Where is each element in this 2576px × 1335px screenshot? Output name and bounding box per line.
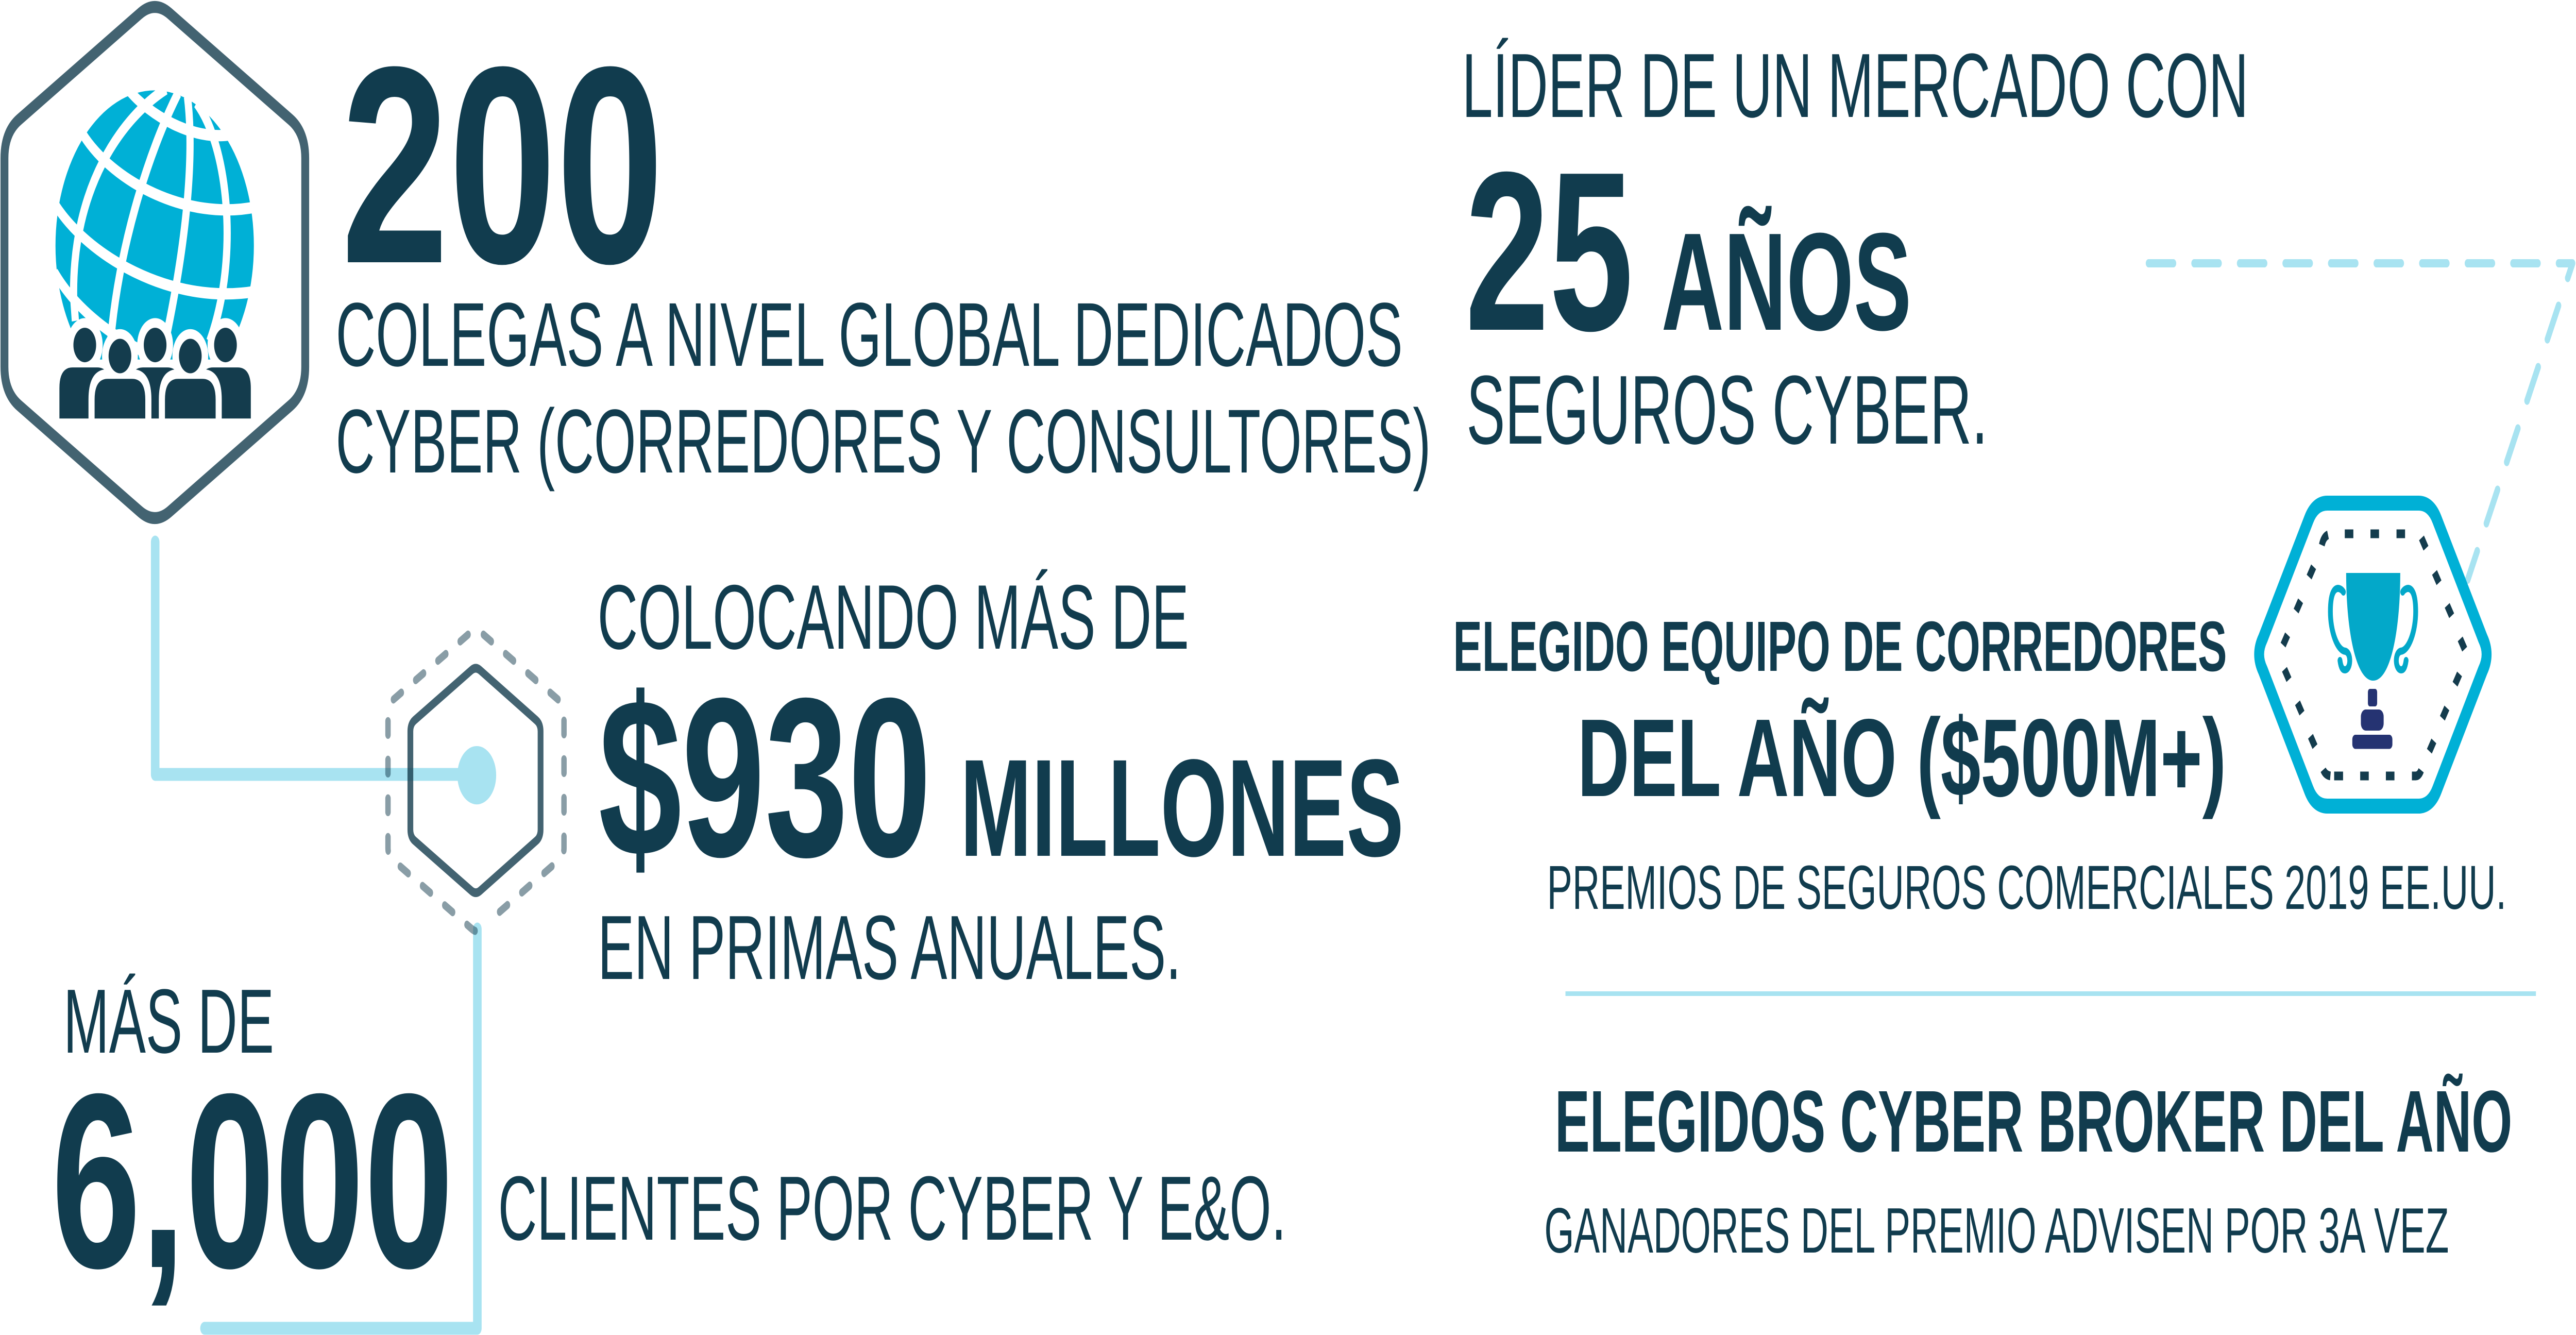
leader caption: SEGUROS CYBER.: [1466, 356, 1988, 465]
trophy handles: [2330, 588, 2416, 670]
trophy base: [2352, 689, 2393, 749]
block: 200 colleagues: [336, 9, 1431, 492]
leader intro: LÍDER DE UN MERCADO CON: [1462, 35, 2248, 137]
premiums caption: EN PRIMAS ANUALES.: [598, 897, 1181, 999]
globe and colleagues artwork: [55, 89, 256, 428]
dashed hexagon: [388, 635, 564, 931]
number 6,000: 6,000: [52, 1042, 453, 1320]
block: cyber broker award: [1544, 1072, 2512, 1266]
solid hexagon: [411, 668, 540, 893]
description line 1: COLEGAS A NIVEL GLOBAL DEDICADOS: [336, 284, 1403, 385]
award heading line 1: ELEGIDO EQUIPO DE CORREDORES: [1453, 606, 2227, 686]
dashed inner ring: [2283, 534, 2465, 776]
word AÑOS: AÑOS: [1662, 204, 1911, 360]
hexagon outline: [2259, 503, 2486, 806]
award caption: GANADORES DEL PREMIO ADVISEN POR 3A VEZ: [1544, 1195, 2449, 1266]
award source: PREMIOS DE SEGUROS COMERCIALES 2019 EE.UU.: [1547, 852, 2506, 922]
icon: globe and people in hexagon: [5, 7, 305, 518]
trophy cup: [2346, 573, 2400, 681]
clients caption: CLIENTES POR CYBER Y E&O.: [498, 1157, 1286, 1259]
hexagon outline: [5, 7, 305, 518]
connector: small hexagon to clients: [205, 929, 478, 1328]
description line 2: CYBER (CORREDORES Y CONSULTORES): [336, 391, 1431, 492]
award heading line 2: DEL AÑO ($500M+): [1578, 696, 2226, 820]
number 25: 25: [1465, 125, 1633, 378]
icon: trophy in hexagon: [2259, 503, 2486, 806]
connector: hexagon to hexagon: [155, 542, 477, 774]
number $930: $930: [599, 651, 931, 904]
icon: small hexagon node: [388, 635, 564, 931]
block: premiums: [598, 566, 1404, 999]
block: market leader: [1462, 35, 2248, 465]
divider: [1566, 991, 2536, 996]
clients intro: MÁS DE: [63, 970, 274, 1072]
node dot: [457, 746, 496, 804]
premiums intro: COLOCANDO MÁS DE: [598, 566, 1189, 669]
dashed connector to trophy: [2148, 263, 2572, 580]
number 200: 200: [341, 9, 664, 323]
word MILLONES: MILLONES: [960, 731, 1404, 886]
block: broker team award: [1453, 606, 2506, 922]
block: clients: [52, 970, 1286, 1320]
